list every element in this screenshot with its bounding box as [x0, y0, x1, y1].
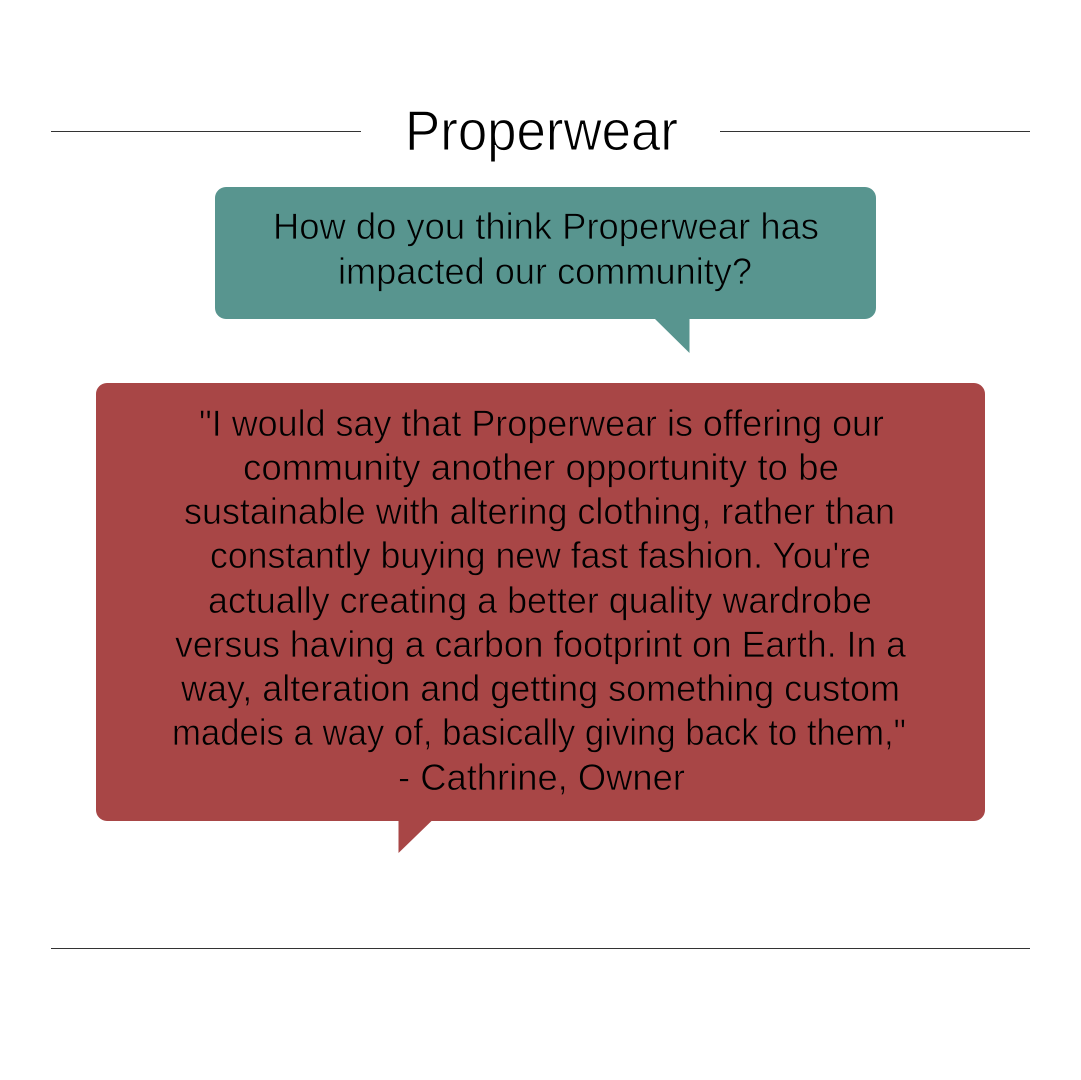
answer quote text: madeis a way of, basically giving back to them,"	[172, 712, 906, 753]
question text: How do you think Properwear has	[273, 206, 819, 247]
title: Properwear	[405, 99, 678, 163]
question text	[273, 206, 819, 292]
panel: question speech bubble	[215, 187, 876, 353]
answer quote text: way, alteration and getting something custom	[180, 668, 900, 709]
answer quote text: sustainable with altering clothing, rather than	[184, 491, 895, 532]
answer bubble shape	[96, 383, 985, 853]
answer quote text	[172, 403, 906, 798]
answer quote text: community another opportunity to be	[243, 447, 839, 488]
answer quote text: versus having a carbon footprint on Earth. In a	[175, 624, 906, 665]
answer quote text: actually creating a better quality wardrobe	[208, 580, 872, 621]
question text: impacted our community?	[338, 251, 752, 292]
question bubble shape	[215, 187, 876, 353]
answer quote text: constantly buying new fast fashion. You're	[210, 535, 871, 576]
answer quote text: "I would say that Properwear is offering our	[199, 403, 884, 444]
answer quote text: - Cathrine, Owner	[398, 757, 685, 798]
panel: answer speech bubble	[96, 383, 985, 853]
